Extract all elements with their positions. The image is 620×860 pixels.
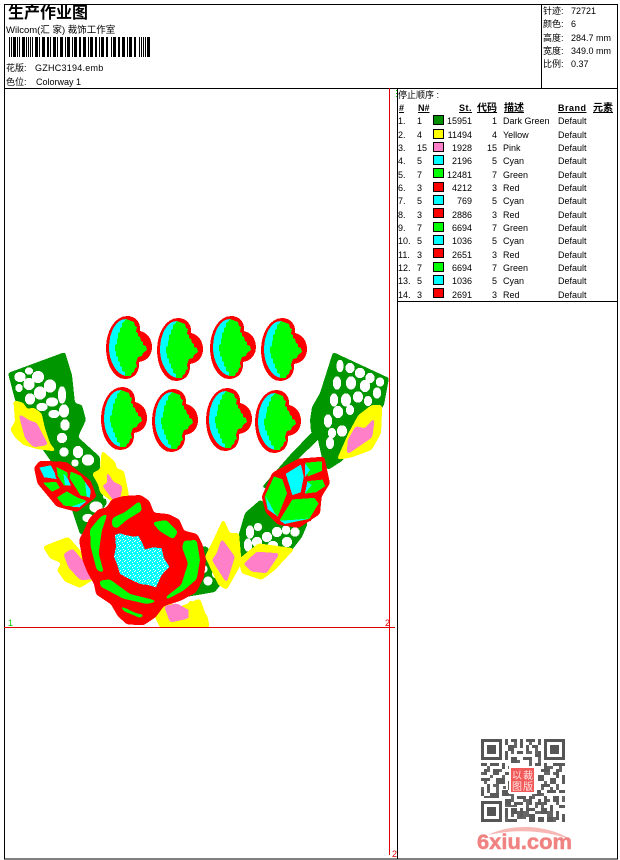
- embroidery design: [8, 316, 389, 628]
- row 6: [398, 182, 587, 193]
- row 9: 9.: [398, 223, 406, 233]
- design file name: GZHC3194.emb: [35, 63, 104, 73]
- company name: Wilcom(汇 家) 裁饰工作室: [6, 24, 115, 36]
- row 9: 7: [417, 223, 422, 233]
- table column headers: #: [399, 103, 404, 113]
- row 14: 3: [492, 290, 497, 300]
- row 2: 11494: [448, 130, 472, 140]
- row 1: 1.: [398, 116, 406, 126]
- row 3: 15: [487, 143, 497, 153]
- QR centre seal: 以: [512, 771, 522, 782]
- right green lace and stem: [238, 352, 389, 562]
- QR modules: [481, 739, 565, 822]
- small green dots: [396, 90, 397, 97]
- row 4: Cyan: [503, 156, 524, 166]
- row 11: 3: [492, 250, 497, 260]
- row 12: 7: [492, 263, 497, 273]
- row 5: Default: [558, 170, 587, 180]
- green start marker: 1: [8, 618, 13, 628]
- lower centre lace: [170, 545, 222, 598]
- row 2: Default: [558, 130, 587, 140]
- row 5: Green: [503, 170, 528, 180]
- row 9: 7: [492, 223, 497, 233]
- row 1: [398, 116, 587, 126]
- design statistics: 针迹:: [543, 6, 564, 16]
- row 6: Red: [503, 183, 520, 193]
- row 13: Default: [558, 276, 587, 286]
- row 8: 3: [417, 210, 422, 220]
- row 13: 13.: [398, 276, 411, 286]
- row 11: 2651: [452, 250, 472, 260]
- row 1: Default: [558, 116, 587, 126]
- red marker 2: 2: [385, 618, 390, 628]
- row 3: 3.: [398, 143, 406, 153]
- row 10: Default: [558, 236, 587, 246]
- row 12: 6694: [452, 263, 472, 273]
- design statistics: 72721: [571, 6, 596, 16]
- row 10: 5: [417, 236, 422, 246]
- design statistics: 比例:: [543, 59, 564, 69]
- colorway: Colorway 1: [36, 77, 81, 87]
- table column headers: N#: [418, 103, 430, 113]
- row 3: 1928: [452, 143, 472, 153]
- row 11: Default: [558, 250, 587, 260]
- row 7: 5: [417, 196, 422, 206]
- design statistics: 284.7 mm: [571, 33, 611, 43]
- left green lace: [8, 352, 112, 535]
- table column headers: Brand: [558, 103, 587, 113]
- row 6: Default: [558, 183, 587, 193]
- row 5: [398, 168, 587, 180]
- table column headers: [399, 101, 613, 114]
- row 13: 1036: [452, 276, 472, 286]
- row 12: Green: [503, 263, 528, 273]
- row 9: 6694: [452, 223, 472, 233]
- row 2: 4: [492, 130, 497, 140]
- row 2: Yellow: [503, 130, 529, 140]
- row 1: Dark Green: [503, 116, 550, 126]
- row 14: 2691: [452, 290, 472, 300]
- row 2: [398, 130, 587, 140]
- design statistics: 0.37: [571, 59, 589, 69]
- row 5: 5.: [398, 170, 406, 180]
- row 12: [398, 262, 587, 273]
- row 4: 2196: [452, 156, 472, 166]
- QR centre seal: 图: [512, 781, 522, 793]
- row 6: 6.: [398, 183, 406, 193]
- row 14: 3: [417, 290, 422, 300]
- stop sequence table: [398, 89, 613, 300]
- right flower bud cluster: [262, 457, 330, 528]
- logo swoosh: [488, 827, 572, 840]
- table column headers: St.: [459, 103, 472, 113]
- design statistics: 6: [571, 19, 576, 29]
- QR centre seal: 版: [523, 780, 533, 793]
- table column headers: 描述: [504, 101, 524, 114]
- row 8: 3: [492, 210, 497, 220]
- row 14: Default: [558, 290, 587, 300]
- table column headers: 元素: [593, 101, 613, 114]
- row 3: Pink: [503, 143, 521, 153]
- row 10: 5: [492, 236, 497, 246]
- row 4: 4.: [398, 156, 406, 166]
- row 6: 3: [492, 183, 497, 193]
- row 3: [398, 142, 587, 153]
- row 12: 7: [417, 263, 422, 273]
- header: title and file information: [6, 4, 150, 87]
- row 9: Green: [503, 223, 528, 233]
- row 4: 5: [417, 156, 422, 166]
- row 8: [398, 208, 587, 220]
- row 8: 2886: [452, 210, 472, 220]
- row 9: Default: [558, 223, 587, 233]
- row 7: Default: [558, 196, 587, 206]
- top row of petal motifs: [106, 316, 307, 381]
- row 14: [398, 288, 587, 300]
- row 1: 1: [492, 116, 497, 126]
- table heading: 停止顺序 :: [398, 89, 439, 100]
- barcode: [9, 37, 150, 57]
- row 13: Cyan: [503, 276, 524, 286]
- row 7: Cyan: [503, 196, 524, 206]
- row 8: Default: [558, 210, 587, 220]
- row 3: Default: [558, 143, 587, 153]
- row 7: [398, 196, 587, 206]
- design statistics: 宽度:: [543, 46, 564, 56]
- left yellow and pink leaves: [10, 400, 210, 628]
- row 14: Red: [503, 290, 520, 300]
- row 10: [398, 236, 587, 246]
- row 3: 15: [417, 143, 427, 153]
- row 13: 5: [417, 276, 422, 286]
- QR code: [481, 739, 565, 822]
- QR centre seal: 裁: [523, 769, 533, 782]
- bottom red marker: 2: [392, 849, 397, 859]
- left flower bud cluster: [34, 461, 97, 512]
- row 10: 10.: [398, 236, 411, 246]
- title: 生产作业图: [8, 4, 88, 22]
- logo text: 6xiu.com: [477, 831, 572, 854]
- row 5: 7: [492, 170, 497, 180]
- row 10: 1036: [452, 236, 472, 246]
- row 7: 769: [457, 196, 472, 206]
- row 13: [398, 276, 587, 286]
- row 10: Cyan: [503, 236, 524, 246]
- row 12: Default: [558, 263, 587, 273]
- row 2: 2.: [398, 130, 406, 140]
- row 2: 4: [417, 130, 422, 140]
- row 7: 5: [492, 196, 497, 206]
- QR centre seal: [509, 766, 537, 794]
- row 11: [398, 248, 587, 260]
- row 8: Red: [503, 210, 520, 220]
- row 4: Default: [558, 156, 587, 166]
- registration marks and guide lines: [4, 88, 397, 859]
- row 13: 5: [492, 276, 497, 286]
- row 5: 7: [417, 170, 422, 180]
- design statistics: 颜色:: [543, 19, 564, 29]
- row 11: Red: [503, 250, 520, 260]
- row 7: 7.: [398, 196, 406, 206]
- row 12: 12.: [398, 263, 411, 273]
- large red flower: [79, 495, 206, 625]
- row 1: 1: [417, 116, 422, 126]
- row 11: 3: [417, 250, 422, 260]
- design statistics: 349.0 mm: [571, 46, 611, 56]
- row 14: 14.: [398, 290, 411, 300]
- design statistics: 高度:: [543, 33, 564, 43]
- 6xiu.com logo: [477, 827, 572, 854]
- row 5: 12481: [447, 170, 472, 180]
- row 6: 4212: [452, 183, 472, 193]
- row 6: 3: [417, 183, 422, 193]
- design file name: 花版:: [6, 63, 27, 73]
- row 1: 15951: [447, 116, 472, 126]
- second row of petal motifs: [101, 387, 301, 453]
- row 8: 8.: [398, 210, 406, 220]
- row 4: [398, 156, 587, 166]
- row 4: 5: [492, 156, 497, 166]
- row 11: 11.: [398, 250, 410, 260]
- table column headers: 代码: [477, 101, 497, 114]
- row 9: [398, 222, 587, 233]
- right yellow and pink leaves: [188, 405, 382, 628]
- design statistics: [543, 5, 611, 69]
- colorway: 色位:: [6, 77, 27, 87]
